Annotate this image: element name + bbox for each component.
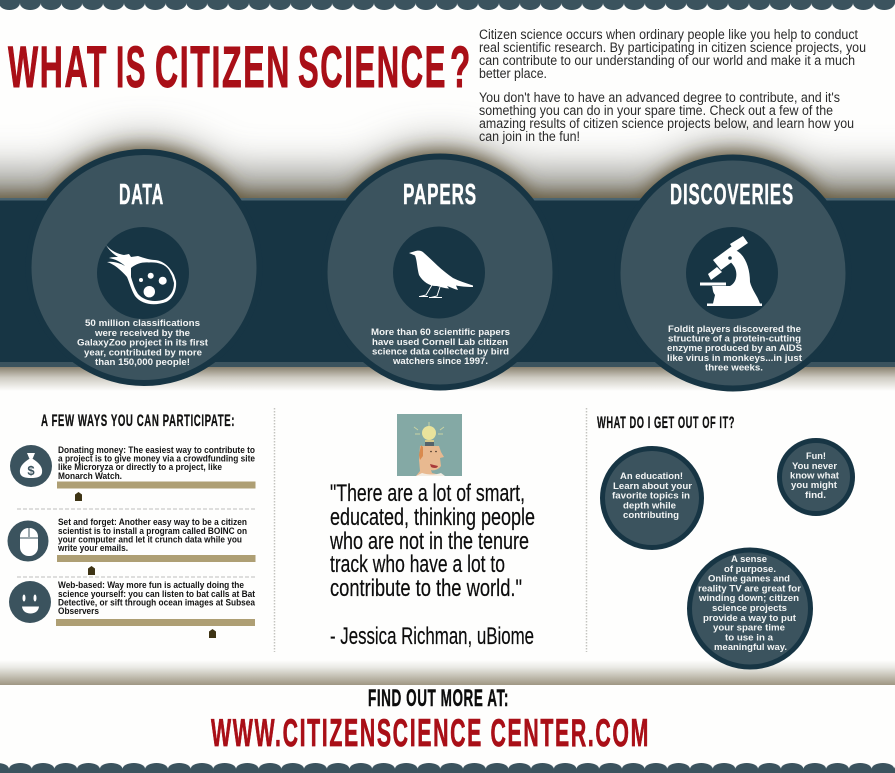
item: donating money: Monarch Watch. (58, 471, 122, 481)
panel: ways to participate (8, 411, 256, 638)
discoveries text (667, 324, 802, 372)
band shadow below (0, 367, 895, 391)
panel: discoveries (618, 158, 848, 388)
icon: smiley face (9, 581, 51, 623)
papers text: have used Cornell Lab citizen (372, 337, 508, 347)
bubble: fun: know what (790, 470, 839, 480)
intro text (479, 27, 866, 144)
intro text: something you can do in your spare time. Check out a few of the (479, 103, 833, 118)
item: set and forget: write your emails. (57, 543, 128, 553)
panel: data (28, 152, 260, 383)
intro text: can contribute to our understanding of our world and make it a much (479, 53, 855, 68)
dark band (0, 198, 895, 367)
intro text: better place. (479, 66, 547, 81)
papers text: More than 60 scientific papers (371, 327, 510, 337)
bubble: a sense of purpose: winding down; citizen (698, 593, 799, 603)
item: web-based: Detective, or sift through ocean images at Subsea (58, 598, 256, 608)
discoveries text: like virus in monkeys...in just (667, 353, 802, 363)
quote text: - Jessica Richman, uBiome (330, 623, 534, 650)
quote text: "There are a lot of smart, (330, 480, 525, 507)
icon: thinking person with lightbulb (397, 414, 462, 476)
bubble: a sense of purpose: reality TV are great for (698, 584, 801, 594)
intro text: real scientific research. By participating in citizen science projects, you (479, 40, 866, 55)
data text: were received by the (94, 328, 190, 338)
progress bar 2 (57, 555, 256, 575)
item: donating money: Donating money: The easiest way to contribute to (58, 445, 255, 455)
papers text (371, 327, 510, 366)
icon: bird (393, 226, 485, 318)
bubble: a sense of purpose: to use in a (725, 632, 774, 642)
data text: than 150,000 people! (95, 357, 190, 367)
heading: discoveries: DISCOVERIES (670, 179, 794, 211)
item: set and forget: Set and forget: Another easy way to be a citizen (58, 517, 247, 527)
footer: find out more: FIND OUT MORE AT: (368, 685, 509, 712)
bubble: fun: you might (791, 480, 837, 490)
bottom scalloped border (0, 762, 895, 773)
bubble: an education: favorite topics in (612, 490, 690, 500)
panel: what do I get out of it (597, 413, 852, 667)
item: set and forget: your computer and let it crunch data while you (58, 534, 242, 544)
icon: computer mouse (8, 520, 48, 562)
panel: papers (324, 156, 556, 388)
data text: year, contributed by more (84, 348, 202, 358)
item: donating money (58, 445, 255, 481)
bubble: a sense of purpose (690, 550, 810, 667)
bubble: a sense of purpose: meaningful way. (714, 642, 787, 652)
bubble: fun: You never (792, 461, 837, 471)
heading: papers: PAPERS (403, 179, 477, 211)
item: donating money: like Microryza or directly to a project, like (58, 462, 222, 472)
quote text: contribute to the world." (330, 575, 522, 602)
quote text: educated, thinking people (330, 504, 535, 531)
data text: 50 million classifications (85, 318, 200, 328)
intro text: amazing results of citizen science projects below, and learn how you (479, 116, 854, 131)
top scalloped border (0, 0, 895, 12)
title (8, 35, 472, 100)
bubble: a sense of purpose: science projects (712, 603, 787, 613)
title: CITIZEN (155, 35, 291, 100)
bubble: an education: Learn about your (613, 481, 692, 491)
band shadow above circles (0, 115, 895, 198)
intro text: Citizen science occurs when ordinary people like you help to conduct (479, 27, 858, 42)
item: web-based: Web-based: Way more fun is actually doing the (58, 580, 244, 590)
item: web-based: Observers (58, 606, 99, 616)
papers text: watchers since 1997. (392, 356, 488, 366)
bubble: a sense of purpose: your spare time (713, 622, 785, 632)
title: ? (450, 35, 472, 100)
bubble: a sense of purpose: provide a way to put (703, 613, 796, 623)
icon: money bag (10, 445, 52, 487)
item: web-based: science yourself: you can listen to bat calls at Bat (58, 589, 255, 599)
progress bar 3 (56, 619, 255, 638)
discoveries text: enzyme produced by an AIDS (667, 343, 802, 353)
quote text: who are not in the tenure (329, 528, 529, 555)
bubble: an education (602, 448, 702, 548)
item: set and forget: scientist is to install a program called BOINC on (58, 526, 247, 536)
discoveries text: three weeks. (705, 362, 763, 372)
bubble: a sense of purpose: of purpose. (724, 564, 776, 574)
heading: benefits: WHAT DO I GET OUT OF IT? (597, 413, 735, 432)
data text (77, 318, 208, 367)
heading: participate: A FEW WAYS YOU CAN PARTICIPATE: (41, 411, 235, 430)
intro text: You don't have to have an advanced degree to contribute, and it's (479, 90, 840, 105)
bubble: a sense of purpose: Online games and (708, 574, 790, 584)
papers text: science data collected by bird (372, 346, 509, 356)
icon: money bag: $ (27, 463, 35, 478)
bubble: fun: Fun! (806, 451, 826, 461)
item: set and forget (57, 517, 247, 553)
item: donating money: a project is to give money via a crowdfunding site (58, 454, 255, 464)
panel: quote (329, 414, 535, 650)
bubble: an education: depth while (623, 500, 676, 510)
bubble: fun: find. (805, 490, 826, 500)
heading: data: DATA (119, 179, 164, 211)
footer shadow band (0, 660, 895, 685)
title: SCIENCE (298, 35, 447, 100)
title: IS (116, 35, 147, 100)
progress bar 1 (57, 482, 256, 501)
data text: GalaxyZoo project in its first (77, 338, 208, 348)
item: web-based (58, 580, 256, 616)
icon: comet (97, 227, 189, 319)
discoveries text: structure of a protein-cutting (668, 334, 801, 344)
quote text (329, 480, 535, 650)
bubble: an education: An education! (620, 471, 683, 481)
intro text: can join in the fun! (479, 129, 580, 144)
bubble: an education: contributing (623, 510, 679, 520)
title: WHAT (8, 35, 108, 100)
bubble: fun (780, 440, 852, 514)
bubble: a sense of purpose: A sense (731, 554, 767, 564)
quote text: track who have a lot to (330, 551, 505, 578)
icon: microscope (686, 227, 778, 319)
discoveries text: Foldit players discovered the (668, 324, 801, 334)
